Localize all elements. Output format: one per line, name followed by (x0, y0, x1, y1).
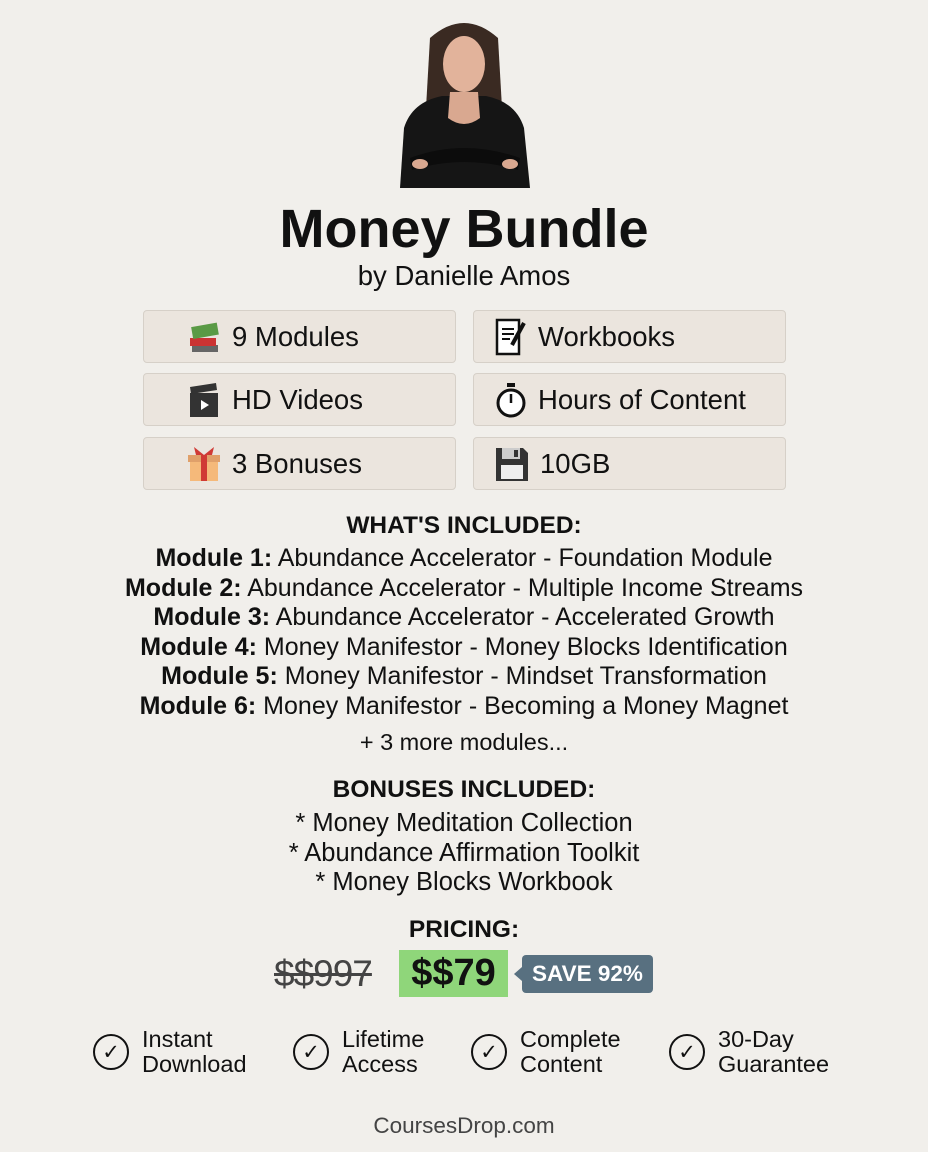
module list: Module 3: Abundance Accelerator - Accelerated Growth (153, 603, 775, 631)
feature: workbooks (473, 310, 786, 363)
module list: Module 1: Abundance Accelerator - Foundation Module (155, 544, 772, 572)
bonus list (289, 809, 640, 896)
module list (125, 544, 803, 720)
more modules note: + 3 more modules... (360, 729, 568, 755)
module list: Module 4: Money Manifestor - Money Blocks Identification (140, 632, 788, 660)
heading: bonuses: BONUSES INCLUDED: (333, 776, 595, 803)
bonus list: * Abundance Affirmation Toolkit (289, 838, 639, 866)
feature: 9 modules (143, 310, 456, 363)
guarantee: lifetime access (293, 1026, 424, 1077)
old price: $$997 (274, 953, 372, 994)
module list: Module 5: Money Manifestor - Mindset Transformation (161, 662, 767, 690)
new price: $$79 (411, 952, 496, 994)
feature: 10GB (473, 437, 786, 490)
new price (399, 950, 508, 997)
title: Money Bundle (279, 199, 648, 259)
module list: Module 2: Abundance Accelerator - Multiple Income Streams (125, 574, 803, 602)
guarantee: 30-day: Guarantee (718, 1051, 829, 1077)
footer: CoursesDrop.com (373, 1113, 555, 1138)
feature: hours of content (473, 373, 786, 426)
guarantee: complete content: Complete (520, 1026, 621, 1052)
heading: pricing: PRICING: (409, 916, 519, 943)
guarantee: 30-day: 30-Day (718, 1026, 794, 1052)
guarantee: complete content: ✓ (480, 1040, 498, 1064)
guarantee: instant download: Download (142, 1051, 247, 1077)
bonus list: * Money Blocks Workbook (315, 868, 613, 896)
guarantee: 30-day: ✓ (678, 1040, 696, 1064)
guarantee: lifetime access: Lifetime (342, 1026, 424, 1052)
guarantee: 30-day (669, 1026, 829, 1077)
feature: HD videos (143, 373, 456, 426)
module list: Module 6: Money Manifestor - Becoming a Money Magnet (140, 692, 788, 720)
guarantee: instant download: ✓ (102, 1040, 120, 1064)
feature grid (143, 310, 786, 490)
guarantee: complete content: Content (520, 1051, 602, 1077)
feature: 3 bonuses (143, 437, 456, 490)
guarantee: lifetime access: Access (342, 1051, 418, 1077)
feature: HD videos: HD Videos (232, 384, 363, 414)
feature: 10GB: 10GB (540, 448, 610, 478)
save badge (522, 955, 653, 993)
guarantee: instant download: Instant (142, 1026, 213, 1052)
feature: 3 bonuses: 3 Bonuses (232, 448, 362, 478)
guarantee: instant download (93, 1026, 247, 1077)
subtitle: by Danielle Amos (358, 260, 570, 291)
bonus list: * Money Meditation Collection (295, 809, 633, 837)
save badge: SAVE 92% (532, 961, 643, 986)
guarantee: complete content (471, 1026, 621, 1077)
feature: workbooks: Workbooks (538, 320, 675, 352)
guarantee: lifetime access: ✓ (302, 1040, 320, 1064)
feature: hours of content: Hours of Content (538, 384, 746, 414)
feature: 9 modules: 9 Modules (232, 320, 359, 352)
price row (274, 950, 653, 997)
heading: what's included: WHAT'S INCLUDED: (346, 512, 582, 539)
photo: presenter (400, 23, 530, 188)
